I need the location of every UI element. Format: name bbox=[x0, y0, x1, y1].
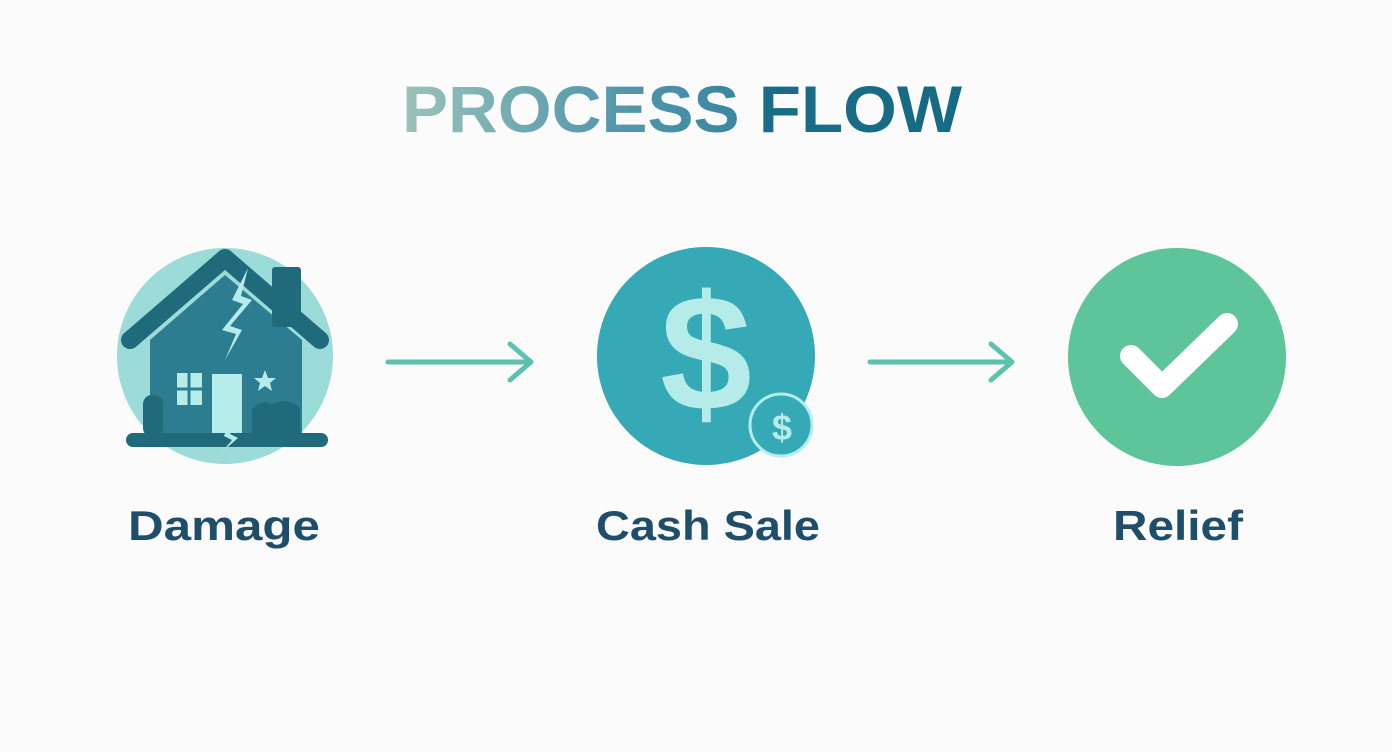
icon: damaged house bbox=[117, 248, 333, 464]
icon: cash: $ bbox=[772, 407, 792, 448]
label: Relief: Relief bbox=[1113, 502, 1244, 549]
arrow 1 bbox=[388, 344, 531, 380]
icon: cash bbox=[597, 247, 815, 465]
title: PROCESS FLOW bbox=[402, 72, 963, 146]
label: Damage: Damage bbox=[128, 502, 320, 549]
icon: cash: $ bbox=[660, 261, 752, 445]
arrow 2 bbox=[870, 344, 1012, 380]
icon: check bbox=[1068, 248, 1286, 466]
label: Cash Sale: Cash Sale bbox=[596, 502, 820, 549]
